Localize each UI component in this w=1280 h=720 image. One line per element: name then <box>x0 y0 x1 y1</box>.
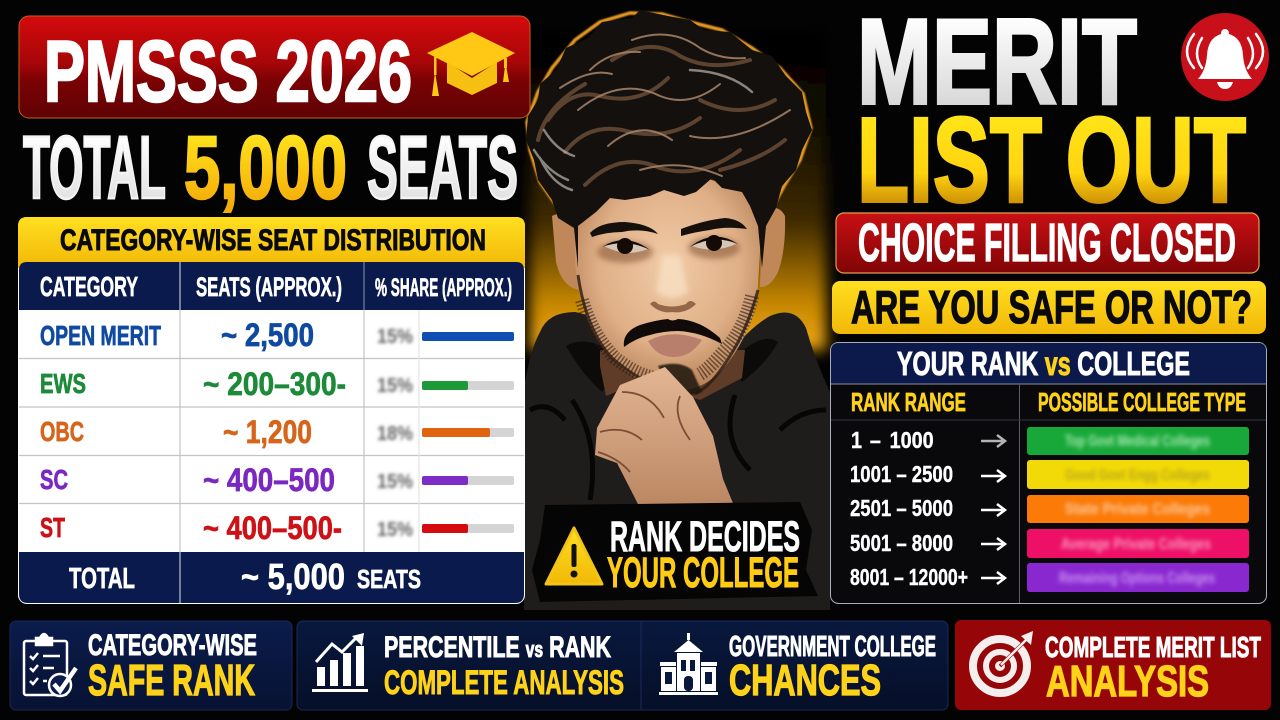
rank panel header: YOUR RANK vs COLLEGE <box>897 345 1190 382</box>
panel: percentile vs rank and government college <box>297 621 948 710</box>
rank row 1: 1000 <box>890 428 934 453</box>
table header row: SEATS (APPROX.) <box>196 272 342 302</box>
row: SC: 15% <box>377 471 413 493</box>
heading: total 5,000 seats: SEATS <box>367 117 518 217</box>
beard stubble <box>578 275 758 394</box>
hood inner <box>566 339 778 392</box>
person portrait <box>524 10 830 610</box>
table header row: % SHARE (APPROX.) <box>375 274 512 302</box>
table title bar <box>18 217 525 268</box>
neck <box>600 350 745 400</box>
table total row <box>19 552 524 603</box>
rank row 1: 1 <box>851 428 862 453</box>
panel: rank vs college <box>830 342 1266 604</box>
row: ST: 15% <box>377 519 413 541</box>
row: SC: ~ 400–500 <box>203 462 335 498</box>
row: open merit <box>40 317 514 353</box>
hoodie <box>524 312 830 610</box>
row: ST: ~ 400–500- <box>203 510 342 546</box>
row: OBC <box>40 414 514 450</box>
heading: total 5,000 seats: 5,000 <box>184 117 347 217</box>
panel: seat distribution table <box>18 217 525 604</box>
table header row: CATEGORY <box>40 271 138 302</box>
hair rim light <box>527 13 811 212</box>
table total row: ~ 5,000 <box>241 556 345 597</box>
rank decides text: RANK DECIDES <box>610 513 800 561</box>
panel: category-wise safe rank <box>10 621 292 710</box>
rank row 4 <box>850 529 1249 558</box>
icon: college building <box>659 633 718 695</box>
rank row 3 <box>850 495 1249 523</box>
row: EWS: 15% <box>377 375 413 397</box>
row: ST <box>40 510 514 546</box>
hand <box>595 367 735 508</box>
eye sockets shading <box>597 237 740 263</box>
icon: warning triangle <box>546 528 602 584</box>
panel: complete merit list analysis <box>955 620 1271 710</box>
row: EWS: ~ 200–300- <box>203 366 346 402</box>
eyes <box>602 235 738 254</box>
rank row 2: 1001 – 2500 <box>850 461 953 487</box>
row: OBC: OBC <box>40 416 84 447</box>
rank row 4: 5001 – 8000 <box>850 530 953 556</box>
panel: category-wise safe rank: SAFE RANK <box>88 656 255 705</box>
rank range column heading: RANK RANGE <box>851 387 966 417</box>
rank row 1 <box>851 427 1249 455</box>
text: government college: GOVERNMENT COLLEGE <box>729 631 936 663</box>
face <box>575 174 763 391</box>
row: EWS <box>40 366 514 402</box>
rank row 3: 2501 – 5000 <box>850 495 953 521</box>
finger lines <box>598 392 690 472</box>
table total row: TOTAL <box>69 563 135 595</box>
eyebrows <box>590 218 747 237</box>
text: complete analysis: COMPLETE ANALYSIS <box>384 664 624 702</box>
rank row 5 <box>850 563 1249 592</box>
hair <box>526 10 812 268</box>
row: ST: ST <box>40 512 65 543</box>
text: chances: CHANCES <box>729 656 881 705</box>
hair highlights <box>538 47 785 185</box>
rank row 2: Good Govt Engg Colleges <box>1065 467 1210 484</box>
row: SC <box>40 462 514 498</box>
hood folds <box>530 395 826 500</box>
rank row 2 <box>850 460 1249 489</box>
moustache <box>624 319 722 347</box>
rank row 1: Top Govt Medical Colleges <box>1065 433 1210 450</box>
row: SC: SC <box>40 464 68 495</box>
row: EWS: EWS <box>40 368 86 399</box>
row: open merit: 15% <box>377 326 413 348</box>
heading: total 5,000 seats <box>23 117 518 217</box>
row: OBC: 18% <box>377 423 413 445</box>
text: category-wise safe rank: CATEGORY-WISE <box>88 629 257 662</box>
banner: PMSSS 2026 <box>19 16 530 120</box>
icon: clipboard <box>24 634 76 696</box>
nose underside <box>650 301 696 312</box>
heading: total 5,000 seats: TOTAL <box>23 117 166 217</box>
table header row <box>19 262 524 310</box>
table title bar: CATEGORY-WISE SEAT DISTRIBUTION <box>60 224 486 257</box>
icon: target <box>973 631 1033 693</box>
icon: growth chart <box>312 633 368 692</box>
row: open merit: OPEN MERIT <box>40 320 161 351</box>
row: open merit: ~ 2,500 <box>221 317 314 353</box>
rank row 5: Remaining Options Colleges <box>1059 570 1215 587</box>
text: percentile vs rank: PERCENTILE vs RANK <box>384 631 611 664</box>
ears <box>552 208 785 290</box>
row: OBC: ~ 1,200 <box>223 414 312 450</box>
text: analysis: ANALYSIS <box>1046 657 1209 706</box>
rank row 4: Average Private Colleges <box>1061 536 1211 553</box>
nose highlight <box>656 255 688 298</box>
callout: rank decides your college <box>532 502 818 602</box>
rank row 3: State Private Colleges <box>1065 501 1210 518</box>
rank row 1: – <box>870 428 881 453</box>
your college text: YOUR COLLEGE <box>607 549 799 597</box>
title text: PMSSS 2026 <box>44 24 412 120</box>
lips <box>648 334 702 357</box>
icon: graduation cap <box>427 32 515 96</box>
chin beard <box>658 364 702 396</box>
rank row 5: 8001 – 12000+ <box>850 564 968 590</box>
glow behind person <box>530 30 826 350</box>
icon: bell <box>1181 13 1269 101</box>
table total row: SEATS <box>357 564 421 594</box>
